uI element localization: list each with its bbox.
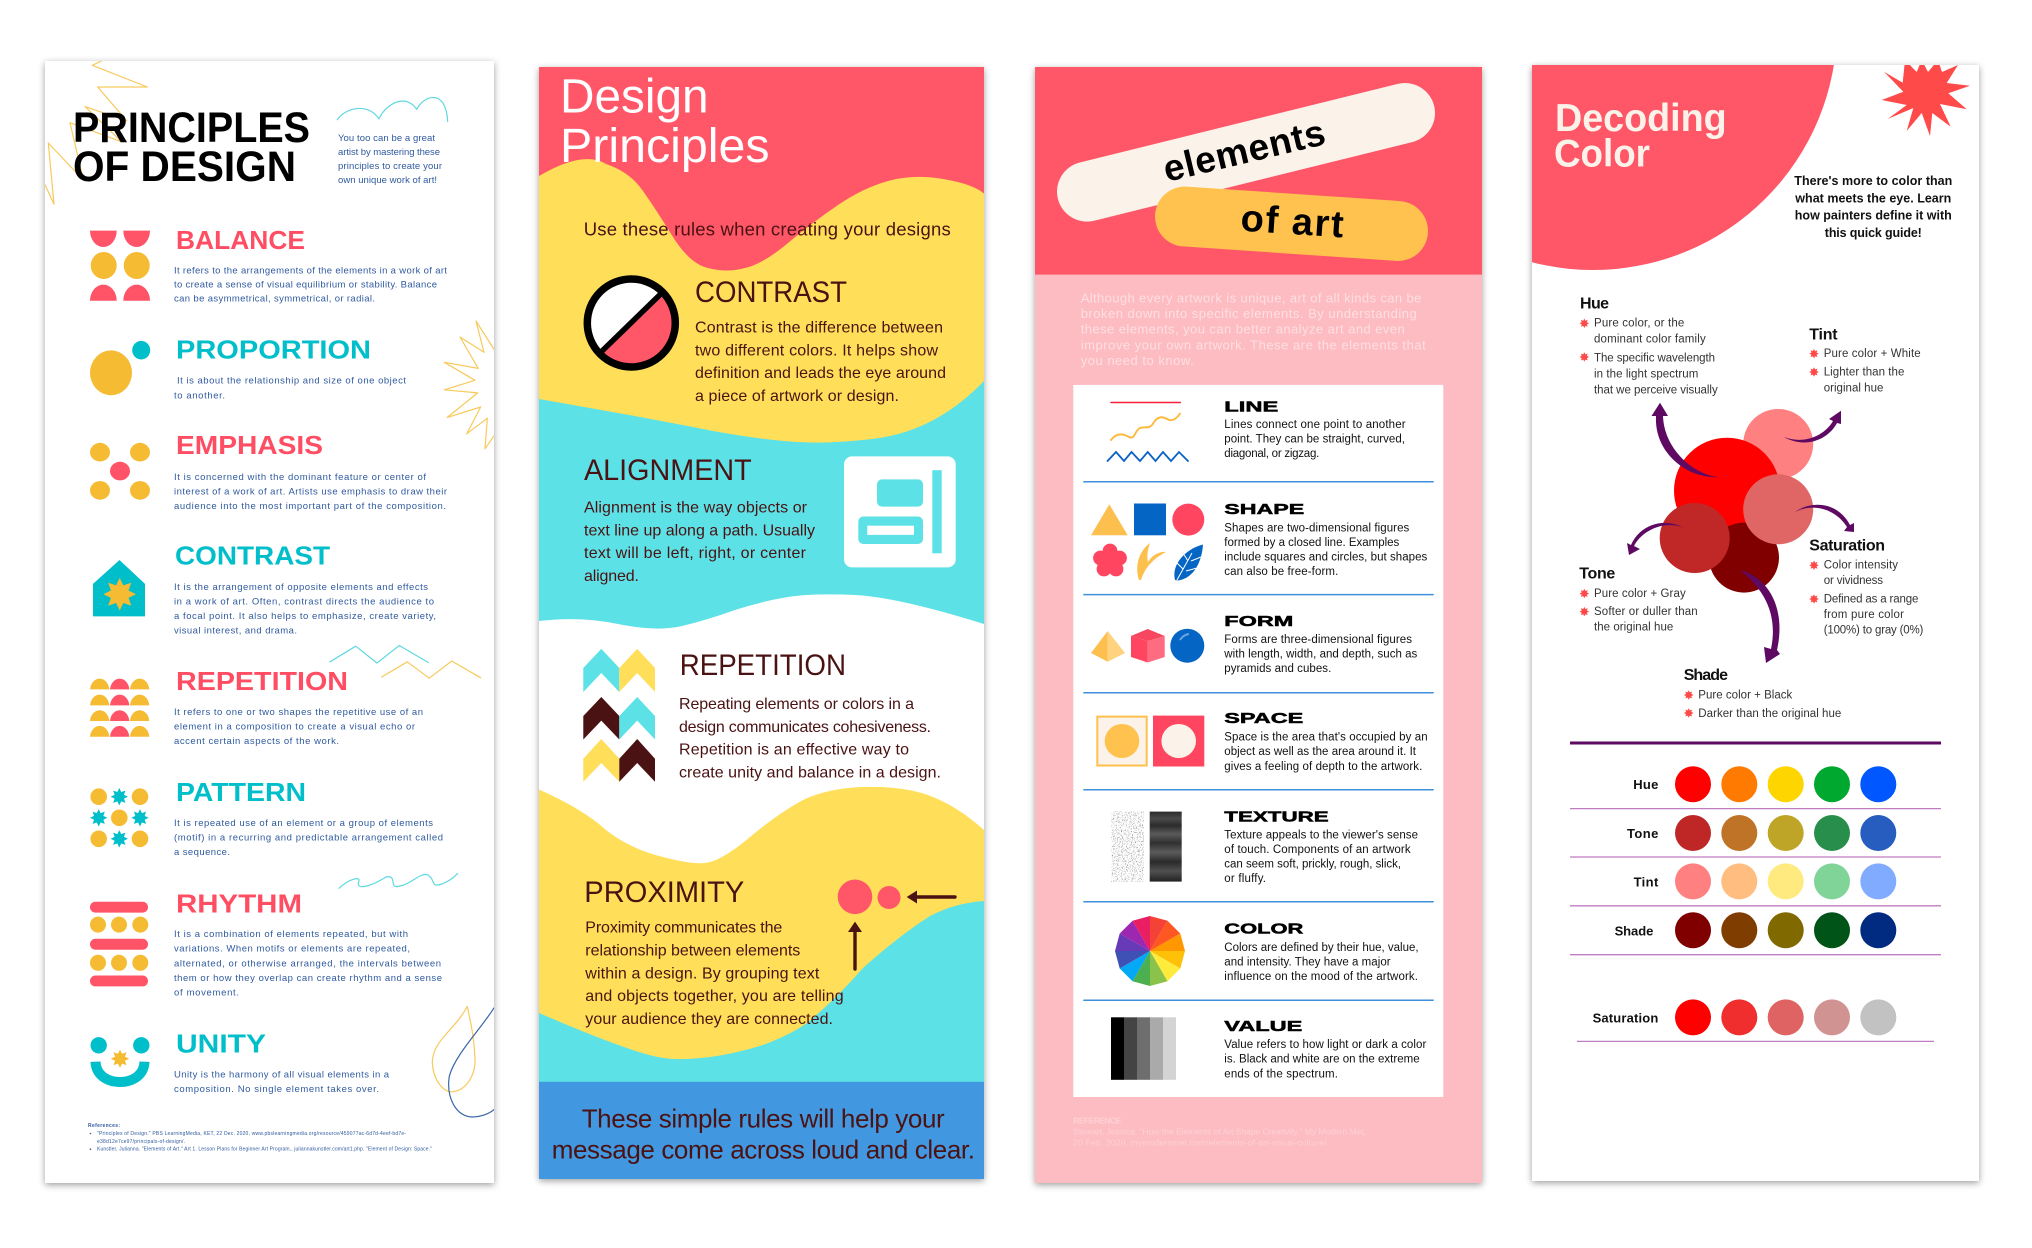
row: saturation swatches: Saturation xyxy=(1593,1010,1658,1026)
label: hue: dominant color family xyxy=(1594,334,1706,346)
row: shape: formed by a closed line. Examples xyxy=(1224,537,1400,549)
row: color: Colors are defined by their hue, value, xyxy=(1224,942,1419,954)
section: alignment: text will be left, right, or center xyxy=(584,545,807,562)
row: texture: of touch. Components of an artwork xyxy=(1224,844,1411,856)
icon: proportion xyxy=(90,341,150,395)
section: contrast xyxy=(584,275,945,404)
row: value xyxy=(1111,1017,1426,1080)
section: repetition: Repeating elements or colors in a xyxy=(679,696,914,713)
row: form: pyramids and cubes. xyxy=(1224,663,1331,675)
closing banner: message come across loud and clear. xyxy=(552,1134,975,1164)
title: Color xyxy=(1554,133,1650,176)
section: proximity: PROXIMITY xyxy=(584,876,744,909)
section: repetition: create unity and balance in a design. xyxy=(679,765,941,782)
panel: decoding color xyxy=(1528,62,1984,1188)
label: tone: Pure color + Gray xyxy=(1594,588,1686,600)
icon: textures xyxy=(1112,812,1182,882)
icon: starburst xyxy=(1882,60,1970,136)
row: line xyxy=(1108,400,1406,461)
label: hue: in the light spectrum xyxy=(1594,369,1698,381)
title: Principles xyxy=(560,120,770,173)
section: contrast xyxy=(93,540,436,637)
label: saturation: or vividness xyxy=(1824,575,1883,587)
panel: principles of design xyxy=(45,61,494,1183)
row: form xyxy=(1091,614,1418,675)
icon: lines xyxy=(1108,402,1188,461)
intro text: this quick guide! xyxy=(1825,226,1922,240)
title: Design xyxy=(560,70,709,123)
section: contrast: Contrast is the difference between xyxy=(695,319,943,336)
row: line: diagonal, or zigzag. xyxy=(1224,448,1319,460)
section: pattern: It is repeated use of an element or a group of elements xyxy=(174,818,433,829)
row: shape: include squares and circles, but shapes xyxy=(1224,552,1428,564)
label: tone: the original hue xyxy=(1594,622,1673,634)
intro text xyxy=(1794,174,1952,240)
section: pattern: a sequence. xyxy=(174,847,230,858)
section: repetition: It refers to one or two shapes the repetitive use of an xyxy=(174,707,423,718)
intro text: artist by mastering these xyxy=(338,147,440,158)
subtitle: Use these rules when creating your designs xyxy=(584,219,951,240)
section: contrast: CONTRAST xyxy=(175,540,330,570)
references xyxy=(88,1123,432,1153)
row: value: ends of the spectrum. xyxy=(1224,1068,1338,1080)
intro text: what meets the eye. Learn xyxy=(1794,191,1951,205)
section: proximity: within a design. By grouping text xyxy=(584,966,820,982)
label: hue: The specific wavelength xyxy=(1594,353,1715,365)
section: balance: to create a sense of visual equilibrium or stability. Balance xyxy=(174,280,437,291)
section: proximity: and objects together, you are telling xyxy=(585,988,844,1005)
label: saturation xyxy=(1809,538,1924,636)
section: rhythm: variations. When motifs or elements are repeated, xyxy=(174,944,410,954)
section: proportion: to another. xyxy=(174,390,225,401)
intro text: principles to create your xyxy=(338,161,442,172)
label: hue: Pure color, or the xyxy=(1594,318,1684,330)
title pills xyxy=(1087,112,1405,246)
arrows xyxy=(1627,403,1854,663)
row: line: point. They can be straight, curved, xyxy=(1224,434,1405,446)
section: rhythm xyxy=(90,889,442,998)
reference xyxy=(1073,1116,1366,1148)
label: saturation: (100%) to gray (0%) xyxy=(1824,624,1924,636)
row: texture xyxy=(1112,809,1418,885)
section: unity: composition. No single element takes over. xyxy=(174,1084,379,1095)
title xyxy=(560,70,770,173)
intro text xyxy=(338,133,442,186)
label: shade: Shade xyxy=(1684,667,1728,684)
section: unity xyxy=(90,1029,390,1095)
title xyxy=(73,104,310,191)
section: balance: It refers to the arrangements of the elements in a work of art xyxy=(174,266,447,276)
references: e38d12e7ce97/principals-of-design/. xyxy=(97,1139,185,1145)
panel: elements of art xyxy=(1035,67,1482,1183)
section: repetition: REPETITION xyxy=(176,666,348,696)
row: value: Value refers to how light or dark a color xyxy=(1224,1039,1426,1051)
title: PRINCIPLES xyxy=(73,104,310,152)
row: form: with length, width, and depth, such as xyxy=(1223,648,1418,660)
row: texture: TEXTURE xyxy=(1224,809,1329,825)
section: repetition: REPETITION xyxy=(680,649,846,682)
row: value: VALUE xyxy=(1224,1019,1303,1035)
title: OF DESIGN xyxy=(73,143,296,191)
section: unity: UNITY xyxy=(176,1029,266,1059)
section: emphasis: interest of a work of art. Artists use emphasis to draw their xyxy=(174,486,447,497)
section: balance: can be asymmetrical, symmetrical, or radial. xyxy=(174,293,375,304)
label: hue: that we perceive visually xyxy=(1594,385,1718,397)
row: tint swatches: Tint xyxy=(1634,874,1659,890)
section: repetition: accent certain aspects of the work. xyxy=(174,736,339,747)
header circle xyxy=(1532,65,1834,270)
label: tint: original hue xyxy=(1824,382,1883,394)
row: shade swatches xyxy=(1615,912,1896,948)
icon: space xyxy=(1097,716,1204,766)
row: space: object as well as the area around it. It xyxy=(1224,746,1417,758)
section: alignment xyxy=(584,454,956,585)
icon: shapes xyxy=(1091,504,1204,580)
label: hue: Hue xyxy=(1580,295,1609,312)
row: shape xyxy=(1091,502,1428,580)
row: space: gives a feeling of depth to the artwork. xyxy=(1224,761,1422,773)
label: shade xyxy=(1684,667,1841,720)
section: pattern: PATTERN xyxy=(176,777,306,807)
section: contrast: a piece of artwork or design. xyxy=(695,388,899,405)
row: shade swatches: Shade xyxy=(1615,923,1653,938)
intro text: There's more to color than xyxy=(1794,174,1952,188)
section: proportion xyxy=(90,334,406,401)
color circles diagram xyxy=(1627,403,1854,663)
section: contrast: It is the arrangement of opposite elements and effects xyxy=(174,582,428,593)
label: tint: Lighter than the xyxy=(1824,367,1904,379)
icon: value scale xyxy=(1111,1017,1176,1080)
title pills: elements xyxy=(1159,112,1329,190)
icon: color wheel xyxy=(1115,916,1185,986)
section: contrast: in a work of art. Often, contrast directs the audience to xyxy=(174,596,434,608)
closing banner: These simple rules will help your xyxy=(582,1104,945,1134)
section: emphasis: audience into the most important part of the composition. xyxy=(174,501,446,512)
references: Kunstler, Julianna. "Elements of Art." Art 1. Lesson Plans for Beginner Art Program., juliannakunstler.com/art1.php. "Element of Design: Space." xyxy=(97,1147,432,1153)
section: emphasis xyxy=(90,430,447,512)
row: form: FORM xyxy=(1224,614,1293,630)
section: emphasis: It is concerned with the dominant feature or center of xyxy=(174,472,426,483)
section: proximity: relationship between elements xyxy=(585,943,800,960)
section: rhythm: of movement. xyxy=(174,988,239,998)
row: hue swatches: Hue xyxy=(1633,777,1658,792)
row: color: COLOR xyxy=(1224,921,1304,937)
row: tint swatches xyxy=(1634,863,1896,899)
icon: proximity circles and arrows xyxy=(838,880,955,969)
icon: repetition domes xyxy=(90,679,149,737)
row: line: LINE xyxy=(1224,400,1279,416)
row: texture: can seem soft, prickly, rough, slick, xyxy=(1224,859,1401,871)
section: rhythm: RHYTHM xyxy=(176,889,302,919)
section: repetition: design communicates cohesiveness. xyxy=(679,719,931,736)
section: alignment: ALIGNMENT xyxy=(584,454,752,487)
label: saturation: Color intensity xyxy=(1824,560,1898,572)
icon: forms xyxy=(1091,629,1204,663)
section: contrast: a focal point. It also helps to emphasize, create variety, xyxy=(174,611,436,622)
icon: contrast house xyxy=(93,560,145,616)
section: rhythm: them or how they overlap can create rhythm and a sense xyxy=(174,973,442,984)
section: alignment: Alignment is the way objects or xyxy=(584,499,808,516)
intro text: broken down into specific elements. By understanding xyxy=(1081,306,1417,321)
intro text: how painters define it with xyxy=(1795,209,1952,223)
icon: pattern xyxy=(90,788,149,847)
label: tone: Softer or duller than xyxy=(1594,606,1698,618)
intro text: You too can be a great xyxy=(338,133,435,144)
row: form: Forms are three-dimensional figures xyxy=(1224,634,1412,646)
row: hue swatches xyxy=(1633,766,1896,802)
swatch table xyxy=(1570,766,1941,1041)
section: balance xyxy=(90,225,447,304)
icon: rhythm xyxy=(90,902,148,986)
row: texture: or fluffy. xyxy=(1224,873,1266,885)
section: proportion: It is about the relationship and size of one object xyxy=(177,376,406,387)
reference: Stewart, Jessica. "How the Elements of Art Shape Creativity." My Modern Met, xyxy=(1073,1126,1366,1136)
references: "Principles of Design." PBS LearningMedia, KET, 22 Dec. 2020, www.pbslearningmedia.org/resource/459077ac-6d7d-4eef-bd7e- xyxy=(97,1131,406,1137)
row: color xyxy=(1115,916,1419,986)
section: pattern xyxy=(90,777,443,858)
row: tone swatches: Tone xyxy=(1627,826,1658,841)
intro text: Although every artwork is unique, art of all kinds can be xyxy=(1081,291,1421,306)
section: contrast: CONTRAST xyxy=(695,276,847,309)
section: contrast: visual interest, and drama. xyxy=(174,626,297,637)
label: saturation: from pure color xyxy=(1824,609,1904,621)
label: shade: Darker than the original hue xyxy=(1698,708,1841,720)
section: pattern: (motif) in a recurring and predictable arrangement called xyxy=(174,833,443,844)
section: emphasis: EMPHASIS xyxy=(176,430,323,460)
label: saturation: Saturation xyxy=(1809,538,1885,554)
section: contrast: definition and leads the eye around xyxy=(695,365,946,382)
icon: balance xyxy=(90,231,150,301)
title xyxy=(1554,97,1727,176)
intro text: these elements, you can better analyze art and even xyxy=(1081,322,1405,337)
row: saturation swatches xyxy=(1593,999,1896,1035)
intro text xyxy=(1081,291,1426,368)
section: proximity: your audience they are connected. xyxy=(585,1011,833,1028)
icon: unity smile xyxy=(90,1037,150,1082)
row: space: SPACE xyxy=(1224,711,1304,727)
section: balance: BALANCE xyxy=(176,225,305,255)
section: proximity xyxy=(584,876,955,1028)
section: repetition xyxy=(90,666,423,747)
icon: contrast circle xyxy=(584,275,680,371)
section: alignment: aligned. xyxy=(584,568,639,585)
closing banner xyxy=(552,1104,975,1164)
section: rhythm: alternated, or otherwise arranged, the intervals between xyxy=(174,958,441,969)
reference: REFERENCE xyxy=(1073,1116,1122,1126)
row: shape: Shapes are two-dimensional figures xyxy=(1224,522,1410,534)
label: tone xyxy=(1579,566,1698,634)
icon: emphasis xyxy=(90,443,150,500)
row: value: is. Black and white are on the extreme xyxy=(1224,1054,1420,1066)
title: Decoding xyxy=(1555,97,1727,140)
intro text: you need to know. xyxy=(1081,353,1194,368)
label: shade: Pure color + Black xyxy=(1698,690,1793,702)
section: repetition: element in a composition to create a visual echo or xyxy=(174,721,415,732)
row: space xyxy=(1097,711,1428,773)
row: color: and intensity. They have a major xyxy=(1224,956,1391,968)
row: line: Lines connect one point to another xyxy=(1224,419,1406,431)
header band xyxy=(1035,67,1482,275)
row: shape: SHAPE xyxy=(1224,502,1305,518)
section: proximity: Proximity communicates the xyxy=(585,920,782,937)
intro text: improve your own artwork. These are the elements that xyxy=(1081,337,1426,352)
label: tint xyxy=(1809,326,1921,394)
title pills: of art xyxy=(1239,198,1345,246)
label: saturation: Defined as a range xyxy=(1824,594,1918,606)
panel: design principles xyxy=(539,67,984,1179)
section: repetition xyxy=(583,649,941,782)
label: hue xyxy=(1580,295,1718,397)
row: texture: Texture appeals to the viewer's sense xyxy=(1224,830,1418,842)
label: tint: Pure color + White xyxy=(1824,348,1921,360)
row: space: Space is the area that's occupied by an xyxy=(1224,732,1428,744)
icon: alignment xyxy=(844,456,956,567)
label: tone: Tone xyxy=(1579,566,1615,583)
section: alignment: text line up along a path. Usually xyxy=(584,522,815,539)
row: shape: can also be free-form. xyxy=(1224,566,1338,578)
section: contrast: two different colors. It helps show xyxy=(695,342,938,359)
row: tone swatches xyxy=(1627,815,1896,851)
section: unity: Unity is the harmony of all visual elements in a xyxy=(174,1069,390,1080)
section: proportion: PROPORTION xyxy=(176,334,371,364)
icon: chevrons xyxy=(583,649,655,782)
references: References: xyxy=(88,1123,120,1129)
section: repetition: Repetition is an effective way to xyxy=(679,742,909,759)
row: color: influence on the mood of the artwork. xyxy=(1224,971,1418,983)
intro text: own unique work of art! xyxy=(338,175,437,186)
reference: 20 Feb. 2020, mymodernmet.com/elements-of-art-visual-culture/. xyxy=(1073,1138,1329,1148)
label: tint: Tint xyxy=(1809,326,1838,343)
card: elements list xyxy=(1073,385,1443,1097)
section: rhythm: It is a combination of elements repeated, but with xyxy=(174,929,408,940)
